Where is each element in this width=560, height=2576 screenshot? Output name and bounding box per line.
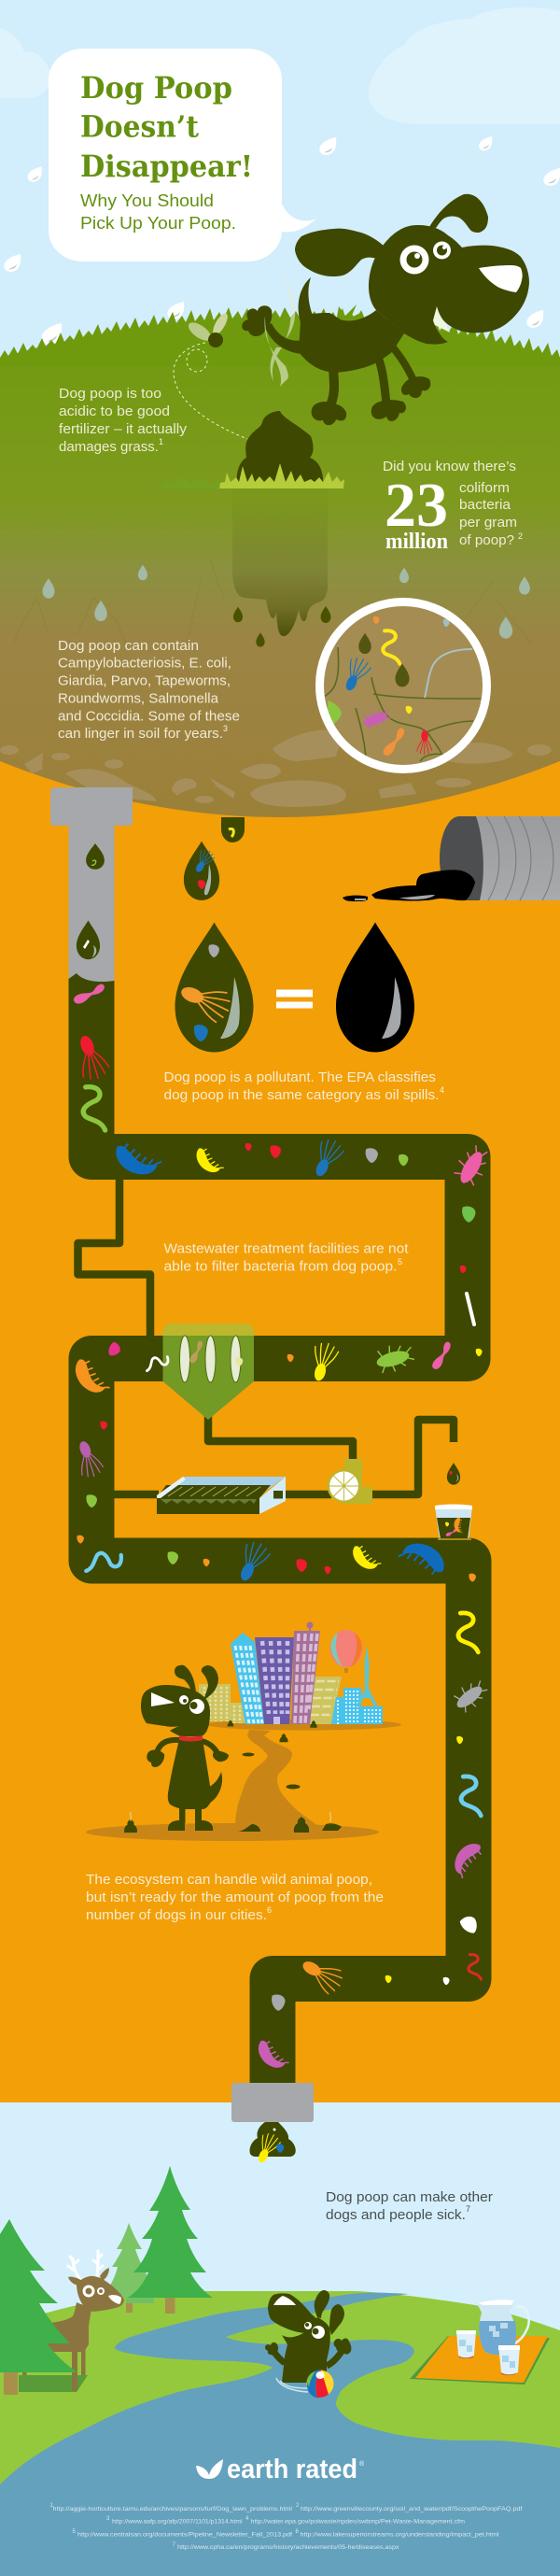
- title: [80, 70, 253, 184]
- ripples: [276, 2378, 308, 2392]
- fact: pathogens: Roundworms, Salmonella: [58, 690, 219, 706]
- settling tank: [162, 1323, 254, 1420]
- references: 4: [245, 2516, 249, 2522]
- million: million: [385, 530, 448, 554]
- references: http://www.cpha.ca/en/programs/history/achievements/05-he/diseases.aspx: [177, 2544, 399, 2551]
- beach ball: [306, 2370, 334, 2398]
- fact: ecosystem: number of dogs in our cities.: [86, 1907, 267, 1923]
- fact: ecosystem: 6: [267, 1905, 272, 1915]
- fact: 23 million: Did you know there’s: [383, 459, 516, 474]
- references: 6: [295, 2529, 299, 2535]
- body: [282, 2317, 330, 2383]
- references: http://www.centralsan.org/documents/Pipeline_Newsletter_Fall_2013.pdf: [77, 2531, 292, 2539]
- fact: 23 million: coliform: [459, 480, 510, 496]
- water pitcher: [477, 2300, 529, 2355]
- soil rain drops: [42, 565, 530, 639]
- drop from soil: [221, 817, 245, 842]
- tail: [299, 277, 314, 322]
- back buildings: [199, 1677, 342, 1724]
- drop in grey pipe top: [86, 843, 105, 870]
- references: http://www.lakesuperiorstreams.org/understanding/impact_pet.html: [301, 2531, 499, 2539]
- fact: sick: 7: [466, 2204, 470, 2214]
- references: 3: [106, 2516, 110, 2522]
- subtitle: Why You Should: [80, 191, 214, 210]
- legs: [329, 369, 334, 407]
- tree left: [0, 2219, 77, 2395]
- soil stones: [0, 729, 552, 807]
- references: http://www.greenvillecounty.org/soil_and_water/pdf/ScoopthePoopFAQ.pdf: [301, 2506, 523, 2512]
- fact: pollutant: dog poop in the same category as oil spills.: [164, 1087, 439, 1103]
- grey pipe outlet: [50, 787, 133, 982]
- deer front leg: [72, 2349, 77, 2391]
- ears: [175, 1665, 196, 1692]
- thin pipe to settling tank: [78, 1180, 150, 1338]
- background: orange pipe section: [0, 392, 560, 2102]
- ear top: [429, 194, 488, 233]
- faded grass: [157, 476, 219, 489]
- pump: [327, 1459, 372, 1504]
- fact: pollutant: Dog poop is a pollutant. The EPA classifies: [164, 1069, 436, 1085]
- smell wisps: [264, 276, 295, 387]
- references: 1: [50, 2503, 54, 2509]
- ground ellipse: [86, 1823, 379, 1841]
- drip into cup: [447, 1463, 460, 1485]
- fact: 23 million: 2: [518, 531, 523, 541]
- tree shadow: [19, 2375, 88, 2392]
- dog: title mascot: [242, 194, 529, 425]
- lower grey outlet: [231, 2083, 314, 2122]
- speech bubble with title: [49, 49, 316, 262]
- drop in grey pipe bottom: [77, 921, 100, 959]
- nose: [108, 2295, 121, 2304]
- raindrops on sky: [4, 136, 560, 345]
- fact: acidic: [59, 386, 188, 455]
- building mauve: [291, 1631, 320, 1724]
- references: 7: [172, 2542, 175, 2548]
- pipe contents: microbes: [69, 984, 494, 2072]
- ground panel: grass to soil: [0, 304, 560, 817]
- fact: 23 million: [383, 459, 523, 554]
- poop pile on grass: [157, 411, 344, 489]
- eyes: [179, 1695, 189, 1705]
- fly with dashed flight trail: [174, 311, 247, 439]
- fact: pollutant: [164, 1069, 444, 1103]
- title: Disappear!: [80, 149, 253, 184]
- background: lower sky: [0, 2102, 560, 2576]
- collar: [179, 1735, 203, 1741]
- fact: sick: dogs and people sick.: [326, 2207, 466, 2223]
- buildings right: [331, 1688, 361, 1724]
- paws: [265, 2342, 278, 2355]
- fact: pathogens: Campylobacteriosis, E. coli,: [58, 656, 231, 672]
- references: http://water.epa.gov/polwaste/npdes/swbmp/Pet-Waste-Management.cfm: [250, 2518, 466, 2526]
- head: [77, 2276, 124, 2312]
- legs: [81, 2349, 86, 2377]
- fact: pathogens: Giardia, Parvo, Tapeworms,: [58, 673, 231, 689]
- fact: 23 million: per gram: [459, 515, 517, 531]
- fact: ecosystem: The ecosystem can handle wild animal poop,: [86, 1872, 372, 1888]
- fact: acidic: fertilizer – it actually: [59, 421, 188, 437]
- fact: acidic: Dog poop is too: [59, 386, 161, 402]
- grass tuft under poop: [219, 463, 344, 488]
- soil microbes: [358, 633, 410, 686]
- drop falling medium: [184, 842, 219, 900]
- grass edge: [0, 307, 560, 366]
- earth rated logo: ®: [359, 2460, 365, 2468]
- raised paw: [242, 305, 272, 336]
- head: [369, 225, 529, 345]
- paws: [312, 402, 346, 425]
- dog: swimming: [265, 2290, 351, 2392]
- city skyline: [199, 1621, 383, 1724]
- arms: [273, 2351, 285, 2363]
- cloud left: [0, 28, 51, 98]
- fact: wastewater: [164, 1241, 409, 1275]
- fact: 23 million: bacteria: [459, 497, 511, 513]
- title: Doesn’t: [80, 108, 199, 144]
- ears: [68, 2277, 82, 2286]
- nose: [151, 1692, 175, 1706]
- tree light back: [105, 2223, 154, 2313]
- tail: [209, 1772, 222, 1803]
- raised hind leg: [265, 323, 304, 354]
- head: [268, 2293, 317, 2333]
- tank filters: [179, 1336, 241, 1382]
- building blue: [231, 1633, 264, 1724]
- deer: [22, 2251, 124, 2380]
- big number: 23: [385, 471, 448, 540]
- references: 5: [73, 2529, 77, 2535]
- filter bed: [157, 1477, 286, 1514]
- cloud right: [369, 7, 560, 124]
- fact: wastewater: 5: [398, 1257, 402, 1267]
- references: [50, 2503, 523, 2551]
- ear left: [295, 229, 385, 276]
- fact: sick: Dog poop can make other: [326, 2189, 493, 2205]
- nose: [273, 2296, 296, 2305]
- equation drop: poop: [175, 923, 254, 1052]
- earth rated logo: earth rated: [227, 2455, 357, 2484]
- oil spill: [343, 870, 475, 901]
- thin pipes: tank to pump and outlet: [114, 1410, 454, 1494]
- fact: pathogens: [58, 638, 240, 742]
- tower: [356, 1646, 378, 1706]
- fact: pathogens: can linger in soil for years.: [58, 726, 223, 742]
- fact: ecosystem: but isn’t ready for the amount of poop from the: [86, 1890, 384, 1905]
- tree right: [128, 2166, 213, 2314]
- small poops on road: [124, 1720, 342, 1833]
- eye large: [399, 245, 429, 275]
- references: http://www.aafp.org/afp/2007/1101/p1314.html: [112, 2518, 243, 2526]
- fact: wastewater: Wastewater treatment facilities are not: [164, 1241, 409, 1257]
- fact: 23 million: of poop?: [459, 532, 514, 548]
- arms: [157, 1740, 180, 1752]
- city ground ellipse: [207, 1719, 401, 1730]
- fact: sick: [326, 2189, 493, 2223]
- white mouth gap: [429, 304, 450, 333]
- references: http://aggie-horticulture.tamu.edu/archives/parsons/turf/Dog_lawn_problems.html: [52, 2506, 293, 2512]
- faint roots: [13, 560, 532, 644]
- fact: acidic: acidic to be good: [59, 403, 170, 419]
- picnic blanket: [410, 2336, 550, 2385]
- steam: [131, 1812, 330, 1821]
- tall grass tuft behind dog: [336, 304, 366, 322]
- background: sky: [0, 0, 560, 392]
- references: 2: [296, 2503, 300, 2509]
- eye small: [433, 241, 451, 260]
- road: [235, 1730, 319, 1826]
- logo leaf: [196, 2459, 223, 2479]
- fact: acidic: 1: [159, 437, 163, 446]
- glass left: [456, 2330, 476, 2358]
- head: [141, 1685, 210, 1736]
- fact: pollutant: 4: [440, 1085, 444, 1095]
- river: [0, 2293, 560, 2576]
- ears: [315, 2290, 329, 2318]
- nose: [479, 265, 523, 292]
- antlers: [68, 2251, 103, 2282]
- equation drop: oil: [336, 923, 414, 1052]
- magnifier circle: [319, 602, 487, 770]
- body: [168, 1739, 212, 1809]
- fact: acidic: damages grass.: [59, 439, 159, 455]
- building purple: [255, 1637, 294, 1724]
- fact: pathogens: and Coccidia. Some of these: [58, 708, 240, 724]
- title: Dog Poop: [80, 70, 232, 106]
- dog: city: [141, 1665, 229, 1831]
- seeping drops: [233, 606, 330, 647]
- balloon: [330, 1630, 362, 1673]
- eyes: [304, 2322, 312, 2329]
- neck and body: [45, 2302, 91, 2352]
- fact: ecosystem: [86, 1872, 384, 1923]
- fact: pathogens: Dog poop can contain: [58, 638, 199, 654]
- fact: pathogens: 3: [223, 724, 228, 733]
- glass right: [498, 2345, 520, 2375]
- roots: [324, 647, 481, 761]
- ground hills: [0, 2291, 560, 2576]
- subtitle: Pick Up Your Poop.: [80, 214, 236, 233]
- eyes: [82, 2285, 95, 2298]
- seeping poop column: [232, 488, 328, 636]
- equals sign: [276, 990, 313, 1009]
- falling poop from outlet: [249, 2122, 296, 2166]
- subtitle: [80, 191, 236, 233]
- cup: [435, 1504, 472, 1540]
- light root: [425, 649, 472, 698]
- fact: wastewater: able to filter bacteria from dog poop.: [164, 1259, 398, 1275]
- culvert pipe: [440, 816, 560, 900]
- main sewage pipe: [91, 962, 469, 2085]
- body: [299, 310, 404, 373]
- legs and feet: [179, 1808, 185, 1823]
